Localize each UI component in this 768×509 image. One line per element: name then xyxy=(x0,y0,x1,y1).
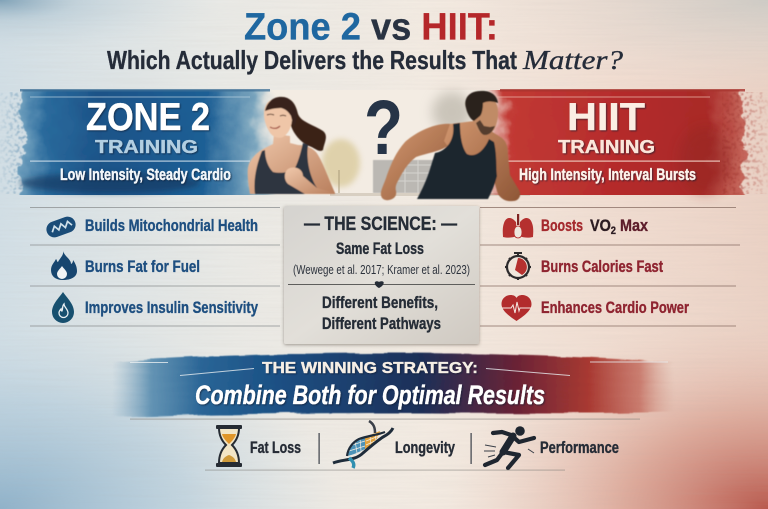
row: burns fat xyxy=(51,251,200,280)
outcomes row xyxy=(216,421,619,468)
heading: — THE SCIENCE: — xyxy=(304,214,457,235)
panel: HIIT benefits xyxy=(480,208,740,326)
heading: THE WINNING STRATEGY: xyxy=(262,360,478,377)
title xyxy=(107,6,624,75)
subtitle: script word: Matter? xyxy=(522,45,624,75)
different pathways: Different Pathways xyxy=(322,314,441,333)
item: longevity xyxy=(333,421,456,468)
label: Burns Calories Fast xyxy=(541,257,663,276)
item: fat loss xyxy=(216,425,301,467)
gradient swash xyxy=(112,353,674,417)
TRAINING label: TRAINING xyxy=(558,137,655,157)
citation: (Wewege et al. 2017; Kramer et al. 2023) xyxy=(293,262,470,277)
icon: lungs xyxy=(503,214,533,238)
panel: HIIT banner xyxy=(487,89,768,201)
VO2 max label: 2 xyxy=(611,225,616,237)
panel: Zone 2 benefits xyxy=(30,208,280,326)
label: Burns Fat for Fuel xyxy=(85,257,200,276)
same fat loss: Same Fat Loss xyxy=(336,239,424,258)
row: mitochondrial health xyxy=(44,214,258,240)
panel background xyxy=(284,206,479,344)
label: Enhances Cardio Power xyxy=(541,298,689,317)
icon: mitochondrion xyxy=(44,214,78,240)
tagline: High Intensity, Interval Bursts xyxy=(519,165,696,184)
row: cardio power xyxy=(502,295,689,321)
VO2 max label: Max xyxy=(620,216,648,235)
row: burns calories xyxy=(505,252,663,280)
row: insulin sensitivity xyxy=(52,292,258,323)
HIIT heading: HIIT xyxy=(567,96,645,139)
divider xyxy=(318,433,320,464)
icon: water drop xyxy=(52,292,74,323)
panel: the science xyxy=(284,206,479,344)
icon: flame xyxy=(51,251,77,280)
blue paint swash xyxy=(0,89,275,198)
label: Builds Mitochondrial Health xyxy=(85,216,258,235)
icon: DNA helix xyxy=(333,421,393,468)
label: Improves Insulin Sensitivity xyxy=(85,298,258,317)
red paint swash xyxy=(487,89,768,201)
illustration: woman running xyxy=(248,97,335,194)
item: performance xyxy=(484,426,619,468)
icon: hourglass xyxy=(216,425,242,467)
heading: Zone 2 vs HIIT: Zone 2 vs HIIT: xyxy=(244,6,498,48)
label: Boosts xyxy=(541,216,583,235)
panel: Zone 2 banner xyxy=(0,89,275,198)
subtitle: Which Actually Delivers the Results That xyxy=(107,45,517,75)
divider xyxy=(470,433,472,464)
row: VO2 max xyxy=(503,214,648,238)
icon: question mark: ? xyxy=(364,85,403,171)
label: Performance xyxy=(540,439,619,457)
icon: stopwatch xyxy=(505,252,531,280)
hero band scenery xyxy=(240,90,530,196)
label: Fat Loss xyxy=(250,439,301,457)
icon: heart with pulse xyxy=(502,295,532,321)
headline: Combine Both for Optimal Results xyxy=(195,380,545,410)
panel: winning strategy banner xyxy=(112,353,674,417)
label: Longevity xyxy=(395,439,456,457)
different benefits: Different Benefits, xyxy=(322,293,438,312)
icon: running figure xyxy=(484,426,534,468)
VO2 max label: VO xyxy=(590,216,615,235)
divider with heart xyxy=(288,281,475,288)
ZONE 2 heading: ZONE 2 xyxy=(86,96,210,139)
illustration: man sprinting xyxy=(381,91,520,201)
TRAINING label: TRAINING xyxy=(95,137,198,157)
tagline: Low Intensity, Steady Cardio xyxy=(60,165,231,184)
